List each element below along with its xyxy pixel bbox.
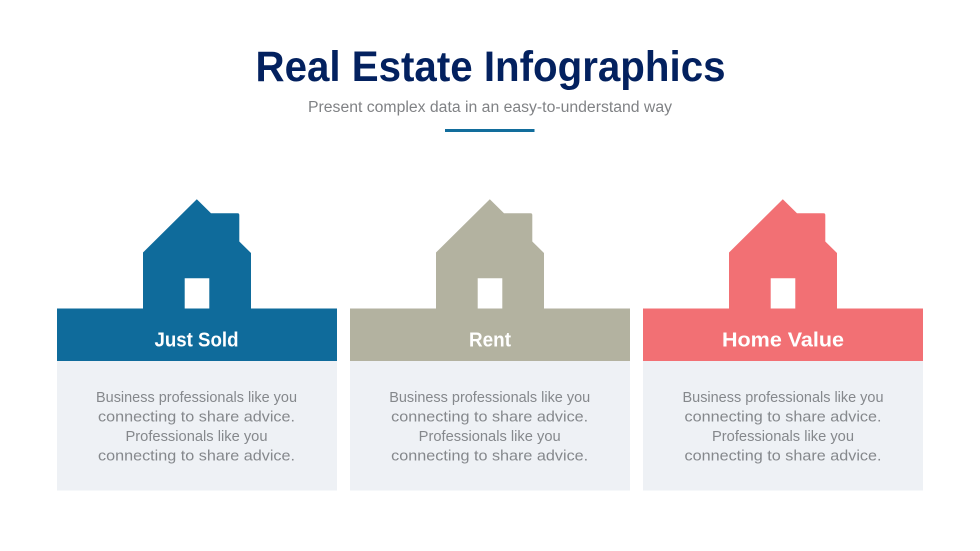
panel: home value xyxy=(643,199,923,491)
heading: rent: Rent xyxy=(469,330,511,352)
description text: home value xyxy=(682,390,884,464)
description text: rent: connecting to share advice. xyxy=(391,410,588,426)
header bar: home value xyxy=(643,308,923,361)
description box: just sold xyxy=(57,361,337,490)
description text: just sold: connecting to share advice. xyxy=(98,448,295,464)
panel: rent xyxy=(350,199,630,491)
description box: home value xyxy=(643,361,923,490)
panel: just sold xyxy=(57,199,337,491)
icon: house red xyxy=(729,199,837,309)
description text: rent: connecting to share advice. xyxy=(391,448,588,464)
description text: just sold: Professionals like you xyxy=(126,429,268,445)
description text: rent xyxy=(389,390,590,464)
description text: home value: connecting to share advice. xyxy=(684,410,882,426)
title: Real Estate Infographics xyxy=(256,43,726,91)
header bar: rent xyxy=(350,308,630,361)
description text: just sold xyxy=(96,390,297,464)
heading: home value: Home Value xyxy=(722,330,844,352)
description text: home value: connecting to share advice. xyxy=(684,448,882,464)
header bar: just sold xyxy=(57,308,337,361)
description text: just sold: Business professionals like you xyxy=(96,390,297,406)
description box: rent xyxy=(350,361,630,490)
subtitle: Present complex data in an easy-to-understand way xyxy=(308,99,672,116)
description text: rent: Professionals like you xyxy=(419,429,561,445)
title underline xyxy=(445,129,534,132)
heading: just sold: Just Sold xyxy=(154,330,238,352)
description text: just sold: connecting to share advice. xyxy=(98,410,295,426)
description text: home value: Business professionals like you xyxy=(682,390,884,406)
icon: house blue xyxy=(143,199,251,309)
icon: house taupe xyxy=(436,199,544,309)
description text: rent: Business professionals like you xyxy=(389,390,590,406)
description text: home value: Professionals like you xyxy=(712,429,854,445)
